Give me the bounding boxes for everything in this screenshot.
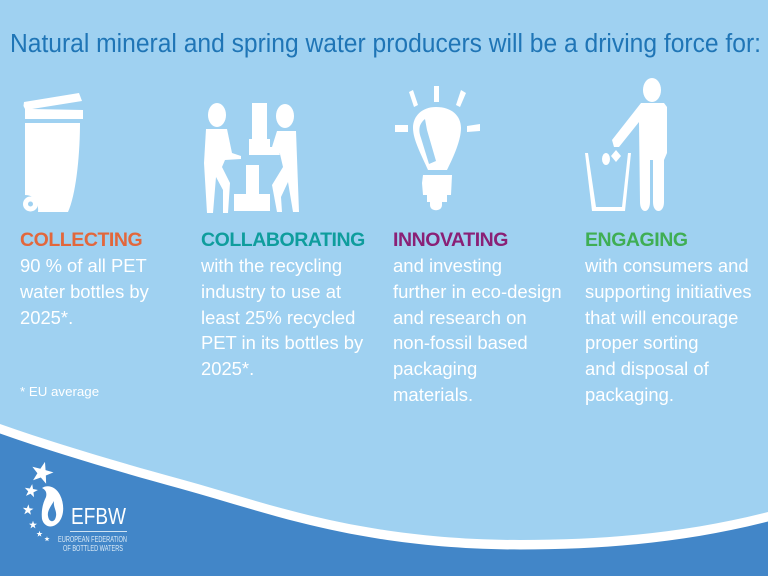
heading: engaging: ENGAGING [585, 229, 688, 251]
heading: collaborating: COLLABORATING [201, 229, 365, 251]
icon: water drop [42, 486, 63, 526]
text: engaging body: and disposal of [585, 358, 709, 379]
text: collaborating body: least 25% recycled [201, 307, 355, 328]
heading: collecting: COLLECTING [20, 229, 142, 251]
text: engaging body: supporting initiatives [585, 281, 752, 302]
text: collaborating body: PET in its bottles by [201, 332, 363, 353]
text: collaborating body: with the recycling [201, 255, 342, 276]
text: collecting body: 2025*. [20, 307, 73, 328]
icon: wheelie bin [23, 93, 83, 212]
icon: two people with boxes [204, 103, 299, 213]
text: innovating body: non-fossil based [393, 332, 528, 353]
text: innovating body: and research on [393, 307, 527, 328]
text: collecting body: water bottles by [20, 281, 149, 302]
text: engaging body: packaging. [585, 384, 674, 405]
text: innovating body [393, 255, 562, 405]
text: engaging body: that will encourage [585, 307, 738, 328]
heading: innovating: INNOVATING [393, 229, 508, 251]
column: collaborating [201, 229, 365, 379]
icon: person using bin [585, 78, 667, 211]
icon: stars [22, 459, 56, 541]
text: innovating body: packaging [393, 358, 477, 379]
text: collecting body: 90 % of all PET [20, 255, 147, 276]
text: engaging body [585, 255, 752, 405]
title: Natural mineral and spring water producers will be a driving force for: [10, 30, 761, 58]
text: collecting body [20, 255, 149, 328]
footnote: * EU average [20, 384, 99, 399]
text: innovating body: materials. [393, 384, 473, 405]
text: collaborating body [201, 255, 364, 379]
column: engaging [585, 229, 752, 405]
text: collaborating body: 2025*. [201, 358, 254, 379]
text: innovating body: and investing [393, 255, 502, 276]
text: engaging body: with consumers and [585, 255, 749, 276]
column: collecting [20, 229, 149, 328]
text: engaging body: proper sorting [585, 332, 698, 353]
column: innovating [393, 229, 562, 405]
text: collaborating body: industry to use at [201, 281, 341, 302]
text: federation name [58, 535, 127, 553]
text: innovating body: further in eco-design [393, 281, 562, 302]
icon: light bulb [395, 86, 480, 210]
logo: EFBW [23, 462, 127, 553]
